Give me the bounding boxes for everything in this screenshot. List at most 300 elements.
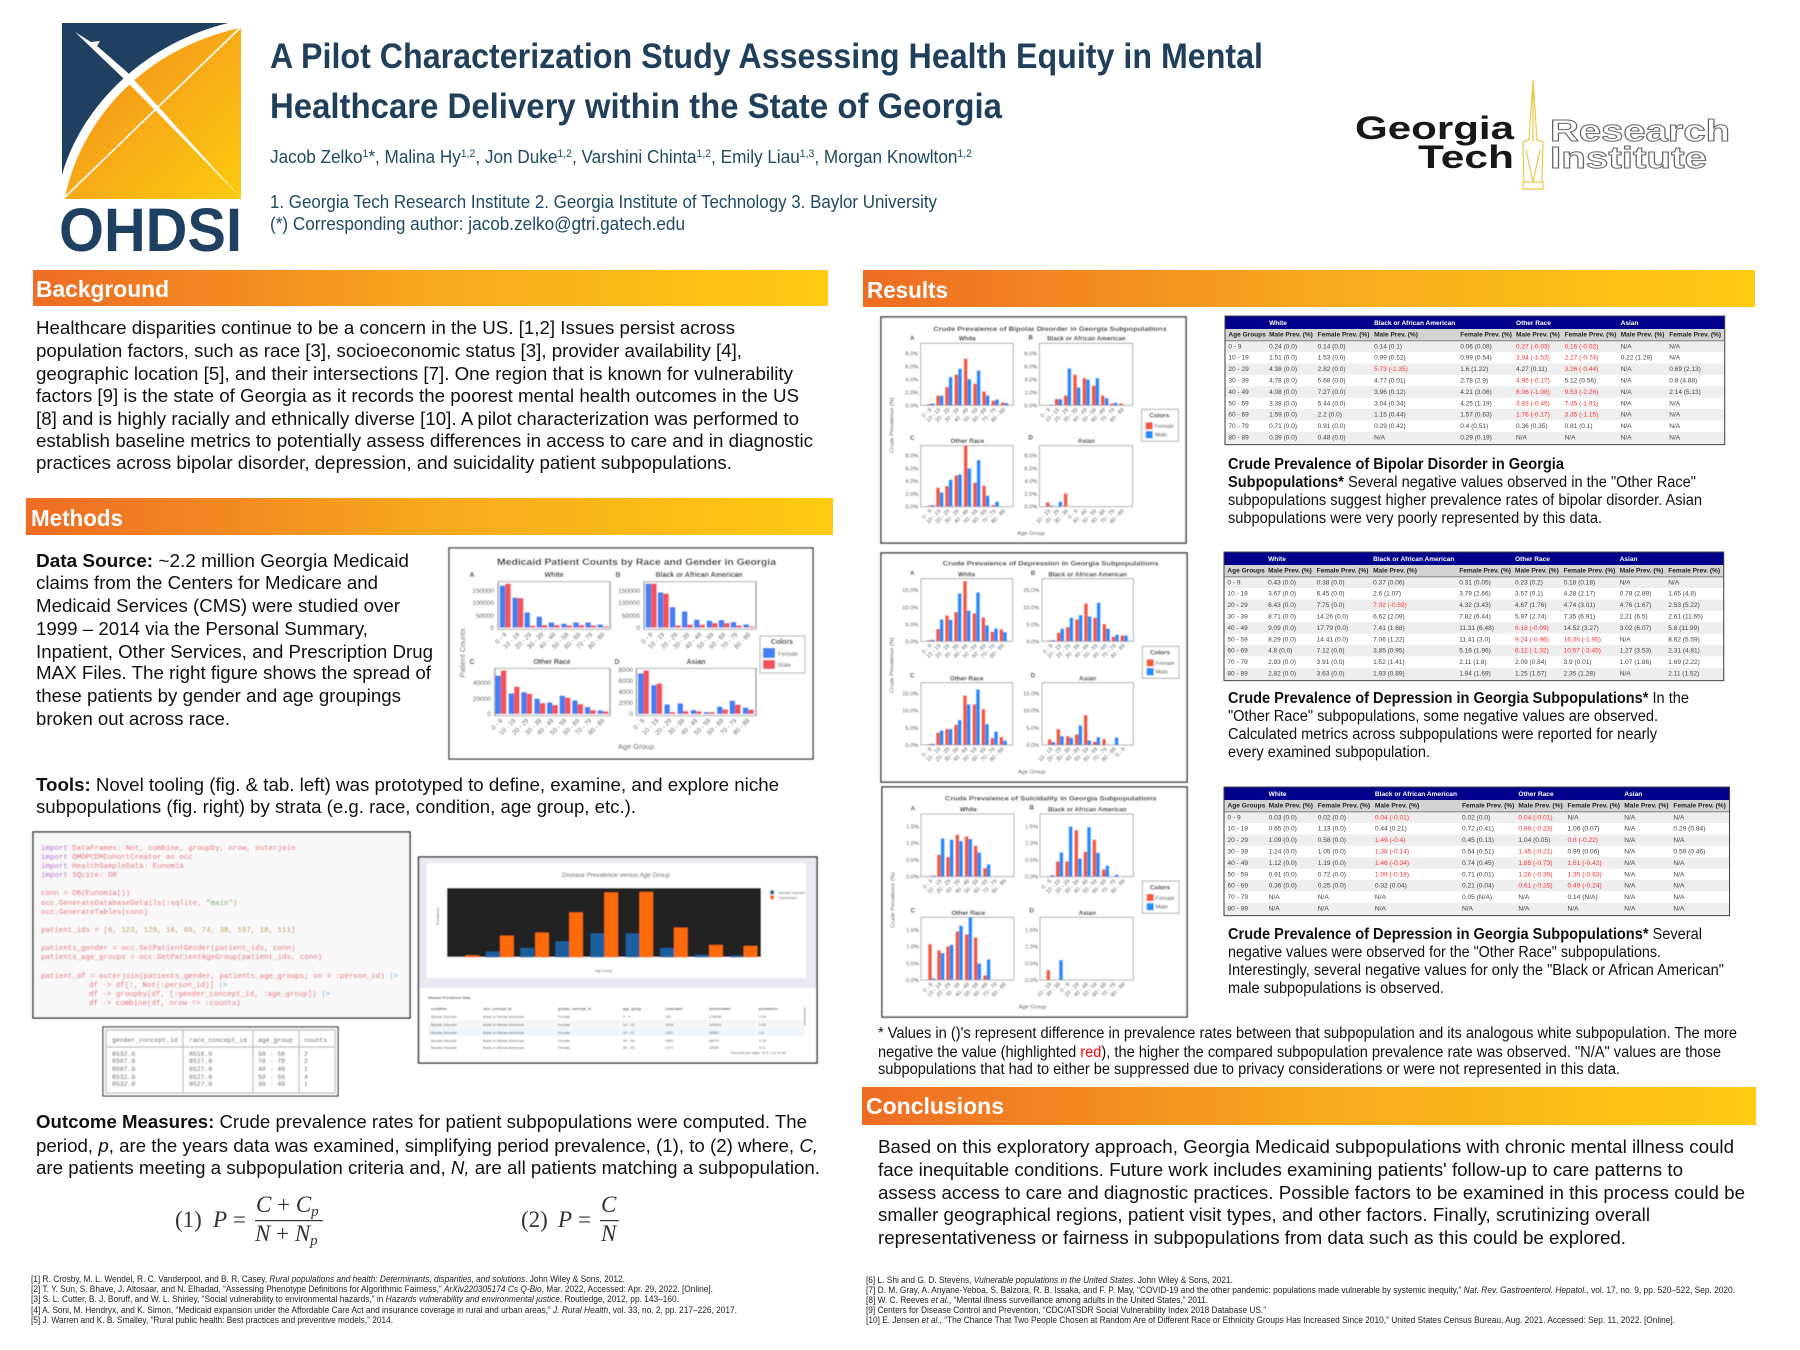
table: depression prevalence: Female Prev. (%) bbox=[1668, 568, 1720, 575]
authors: , Emily Liau bbox=[711, 147, 800, 167]
panel: code snippet: import HealthSampleData: Eunomia bbox=[41, 863, 184, 871]
chart: depression prevalence bbox=[881, 553, 1187, 782]
table: bipolar disorder prevalence: 1.6 (1.22) bbox=[1460, 366, 1488, 373]
references: left: [1] R. Crosby, M. L. Wendel, R. C. Vanderpool, and B. R. Casey, Rural populations and health: Determinants, disparities, and solutions. John Wiley & Sons, 2012. bbox=[31, 1274, 625, 1284]
chart: bipolar disorder prevalence: 60 - 69 bbox=[1090, 407, 1107, 424]
equation 1: C + C bbox=[256, 1192, 311, 1217]
chart: Medicaid patient counts: White bbox=[544, 572, 564, 579]
references: right: [9] Centers for Disease Control and Prevention, “CDC/ATSDR Social Vulnerability Index 2018 Database US.” bbox=[866, 1305, 1266, 1315]
chart: depression prevalence: 40 - 49 bbox=[953, 747, 969, 763]
affiliations: (*) Corresponding author: jacob.zelko@gtri.gatech.edu bbox=[270, 214, 685, 234]
table: bipolar disorder prevalence: Female Prev. (%) bbox=[1565, 332, 1616, 339]
table: depression prevalence: 9.09 (0.0) bbox=[1268, 625, 1296, 632]
chart: Medicaid patient counts: 8000 bbox=[619, 667, 633, 674]
chart: suicidality prevalence: 0.5% bbox=[1025, 961, 1038, 967]
table: cohort counts: 2 bbox=[304, 1051, 308, 1058]
chart: Medicaid patient counts: 50 - 59 bbox=[549, 717, 569, 737]
table: depression prevalence: 1.65 (4.8) bbox=[1668, 591, 1696, 598]
panel: code snippet: import DataFrames: Not, combine, groupby, nrow, outerjoin bbox=[41, 845, 295, 853]
table: bipolar disorder prevalence: 4.08 (0.0) bbox=[1269, 389, 1297, 396]
table: suicidality prevalence: Male Prev. (%) bbox=[1624, 803, 1669, 810]
chart: Medicaid patient counts: 60 - 69 bbox=[706, 717, 726, 737]
table: bipolar disorder prevalence: 2.82 (0.0) bbox=[1318, 366, 1346, 373]
table: depression prevalence: 11.41 (3.0) bbox=[1459, 636, 1490, 643]
table: suicidality prevalence: N/A bbox=[1624, 894, 1636, 901]
table: depression prevalence: 6.43 (0.0) bbox=[1268, 602, 1296, 609]
table: suicidality prevalence: 0.25 (0.0) bbox=[1318, 883, 1346, 890]
text block: outcome measures bbox=[36, 1111, 820, 1178]
panel: dashboard screenshot: 178598 bbox=[709, 1015, 721, 1019]
caption: bipolar disorder: Subpopulations* Several negative values observed in the "Other Race" bbox=[1228, 474, 1696, 491]
references: right: [10] E. Jensen et al., “The Chance That Two People Chosen at Random Are of Different Race or Ethnicity Groups Has Increased Since 2010,” United States Census Bureau, Aug. 2021. Accessed: Sep. 11, 2022. [Online]. bbox=[866, 1315, 1675, 1325]
table: depression prevalence: 7.06 (1.22) bbox=[1373, 636, 1405, 643]
table: suicidality prevalence: 1.46 (-0.34) bbox=[1375, 860, 1409, 867]
chart: depression prevalence: 80 - 89 bbox=[989, 747, 1006, 763]
table: suicidality prevalence: 1.85 (-0.73) bbox=[1518, 860, 1553, 867]
footnote: negative the value (highlighted red), the higher the compared subpopulation prevalence rate was observed. "N/A" values are those bbox=[878, 1044, 1721, 1061]
table: suicidality prevalence: 0.54 (0.51) bbox=[1462, 849, 1494, 856]
chart: depression prevalence: 30 - 39 bbox=[944, 643, 960, 660]
chart: suicidality prevalence: 50 - 59 bbox=[963, 879, 980, 895]
table: depression prevalence: 2.35 (1.28) bbox=[1564, 671, 1595, 678]
table: suicidality prevalence: N/A bbox=[1673, 860, 1685, 867]
panel: dashboard screenshot: Disease Prevalence Data bbox=[428, 996, 471, 1000]
chart: bipolar disorder prevalence: 80 - 89 bbox=[1109, 509, 1126, 525]
table: bipolar disorder prevalence: 9.53 (-2.26) bbox=[1565, 389, 1598, 396]
chart: Medicaid patient counts: 60 - 69 bbox=[562, 717, 582, 737]
table: depression prevalence: 17.79 (0.0) bbox=[1317, 625, 1348, 632]
table: cohort counts: 8527.0 bbox=[189, 1058, 212, 1065]
chart: depression prevalence: 30 - 39 bbox=[1065, 643, 1081, 660]
table: depression prevalence: N/A bbox=[1620, 579, 1631, 586]
chart: Medicaid patient counts: 0 bbox=[636, 625, 640, 632]
table: cohort counts: 40 - 49 bbox=[258, 1081, 285, 1088]
panel: dashboard screenshot: age_group bbox=[623, 1007, 642, 1011]
table: suicidality prevalence: 0 - 9 bbox=[1227, 814, 1241, 821]
table: suicidality prevalence: N/A bbox=[1462, 906, 1474, 913]
chart: bipolar disorder prevalence: 70 - 79 bbox=[1100, 509, 1116, 525]
chart: Medicaid patient counts: 0 - 9 bbox=[640, 631, 655, 646]
chart: bipolar disorder prevalence: 2.0% bbox=[1024, 390, 1037, 396]
chart: depression prevalence: 50 - 59 bbox=[962, 747, 979, 763]
caption: bipolar disorder bbox=[1228, 456, 1702, 527]
chart: bipolar disorder prevalence: 60 - 69 bbox=[972, 509, 988, 525]
table: bipolar disorder prevalence: N/A bbox=[1621, 423, 1632, 430]
chart: Medicaid patient counts: 2000 bbox=[619, 700, 633, 707]
table: bipolar disorder prevalence: 0.16 (-0.02) bbox=[1565, 343, 1598, 350]
text block: conclusions bbox=[878, 1136, 1745, 1248]
table: suicidality prevalence: Female Prev. (%) bbox=[1462, 803, 1514, 810]
chart: depression prevalence: D bbox=[1031, 673, 1036, 680]
table: depression prevalence: 7.12 (0.0) bbox=[1317, 648, 1345, 655]
table: depression prevalence: N/A bbox=[1620, 636, 1631, 643]
table: bipolar disorder prevalence: N/A bbox=[1621, 378, 1632, 385]
table: cohort counts: 8507.0 bbox=[112, 1066, 135, 1073]
table: bipolar disorder prevalence: 7.35 (-1.91) bbox=[1565, 400, 1598, 407]
table: bipolar disorder prevalence: N/A bbox=[1669, 412, 1681, 419]
chart: bipolar disorder prevalence: 30 - 39 bbox=[944, 509, 961, 525]
table: bipolar disorder prevalence: N/A bbox=[1516, 435, 1528, 442]
chart: bipolar disorder prevalence: 30 - 39 bbox=[944, 407, 961, 424]
table: cohort counts: 8516.0 bbox=[189, 1051, 212, 1058]
table: suicidality prevalence: 30 - 39 bbox=[1227, 849, 1248, 856]
text block: outcome measures: period, p, are the years data was examined, simplifying period prevalence, (1), to (2) where, C, bbox=[36, 1135, 818, 1156]
table: depression prevalence: 1.52 (1.41) bbox=[1373, 659, 1405, 666]
chart: suicidality prevalence: Colors bbox=[1150, 884, 1170, 891]
table: bipolar disorder prevalence: N/A bbox=[1621, 412, 1632, 419]
chart: suicidality prevalence: Crude Prevalence of Suicidality in Georgia Subpopulations bbox=[945, 796, 1157, 803]
panel: dashboard screenshot: 0.06 bbox=[759, 1015, 766, 1019]
chart: Medicaid patient counts: 40 - 49 bbox=[536, 717, 556, 737]
table: bipolar disorder prevalence: 0.69 (2.13) bbox=[1669, 366, 1701, 373]
table: cohort counts: gender_concept_id bbox=[112, 1037, 178, 1044]
text block: conclusions: representativeness or fairness in subpopulations from data such as this could be explored. bbox=[878, 1227, 1626, 1248]
chart: Medicaid patient counts: Other Race bbox=[533, 659, 571, 666]
panel: dashboard screenshot: 20 - 29 bbox=[623, 1031, 634, 1035]
equation 1: p bbox=[309, 1233, 318, 1249]
table: bipolar disorder prevalence: 10 - 19 bbox=[1228, 355, 1249, 362]
panel: dashboard screenshot: Bipolar Disorder bbox=[431, 1031, 457, 1035]
chart: bipolar disorder prevalence: 4.0% bbox=[1024, 378, 1037, 384]
chart: suicidality prevalence: 60 - 69 bbox=[973, 982, 989, 999]
panel: dashboard screenshot: race_concept_id bbox=[483, 1007, 511, 1011]
panel: dashboard screenshot: Bipolar Disorder bbox=[779, 891, 806, 895]
table: depression prevalence: Female Prev. (%) bbox=[1459, 568, 1511, 575]
chart: depression prevalence: Male bbox=[1156, 670, 1168, 676]
chart: Medicaid patient counts: 50 - 59 bbox=[693, 717, 713, 737]
panel: dashboard screenshot: Age Group bbox=[595, 969, 612, 973]
table: depression prevalence: 4.32 (3.43) bbox=[1459, 602, 1491, 609]
chart: bipolar disorder prevalence: 10 - 19 bbox=[926, 407, 942, 424]
table: depression prevalence: 2.09 (0.84) bbox=[1515, 659, 1547, 666]
chart: Medicaid patient counts: 80 - 89 bbox=[733, 631, 753, 651]
table: depression prevalence: 1.94 (1.69) bbox=[1459, 671, 1491, 678]
text block: data source: Data Source: ~2.2 million Georgia Medicaid bbox=[36, 550, 409, 571]
table: suicidality prevalence: N/A bbox=[1269, 906, 1280, 913]
table: suicidality prevalence: 1.26 (-0.35) bbox=[1518, 871, 1553, 878]
chart: suicidality prevalence: 70 - 79 bbox=[1101, 982, 1117, 999]
panel: code snippet: patients_age_groups = occ.GetPatientAgeGroup(patient_ids, conn) bbox=[41, 954, 322, 962]
table: depression prevalence: 7.02 (-0.59) bbox=[1373, 602, 1407, 609]
table: cohort counts: 4 bbox=[304, 1074, 308, 1081]
text block: tools: Tools: Novel tooling (fig. & tab. left) was prototyped to define, examine, and explore niche bbox=[36, 774, 779, 795]
chart: depression prevalence: 70 - 79 bbox=[980, 643, 997, 660]
text block: data source: claims from the Centers for Medicare and bbox=[36, 572, 378, 593]
footnote: subpopulations that had to either be suppressed due to privacy considerations or were not represented in this data. bbox=[878, 1061, 1620, 1078]
chart: suicidality prevalence: 10 - 19 bbox=[927, 879, 943, 895]
table: depression prevalence: 0.43 (0.0) bbox=[1268, 579, 1296, 586]
chart: depression prevalence: 15.0% bbox=[1023, 692, 1039, 698]
panel: code snippet: occ.GenerateDatabaseDetails(:sqlite, "main") bbox=[41, 900, 237, 908]
chart: depression prevalence: 10.0% bbox=[902, 605, 918, 611]
chart: depression prevalence: Asian bbox=[1079, 675, 1096, 682]
table: depression prevalence: 3.63 (0.0) bbox=[1317, 671, 1345, 678]
table: bipolar disorder prevalence: Asian bbox=[1621, 320, 1639, 327]
table: suicidality prevalence: 10 - 19 bbox=[1227, 826, 1248, 833]
icon: OHDSI logo: OHDSI bbox=[59, 196, 242, 264]
table: bipolar disorder prevalence: 1.76 (-0.17) bbox=[1516, 412, 1550, 419]
chart: bipolar disorder prevalence: 10 - 19 bbox=[1035, 509, 1052, 525]
caption: depression: "Other Race" subpopulations, some negative values are observed. bbox=[1228, 708, 1658, 725]
table: bipolar disorder prevalence: 0.99 (0.52) bbox=[1374, 355, 1406, 362]
table: bipolar disorder prevalence: 0.29 (0.42) bbox=[1374, 423, 1406, 430]
chart: Medicaid patient counts: 60 - 69 bbox=[563, 631, 583, 651]
table: bipolar disorder prevalence: 4.95 (-0.17) bbox=[1516, 378, 1550, 385]
chart: Medicaid patient counts: Male bbox=[778, 663, 792, 669]
table: suicidality prevalence: 0.05 (N/A) bbox=[1462, 894, 1492, 901]
table: depression prevalence: 0.37 (0.06) bbox=[1373, 579, 1405, 586]
chart: depression prevalence: 60 - 69 bbox=[971, 643, 988, 660]
table: suicidality prevalence: 0.29 (0.84) bbox=[1673, 826, 1705, 833]
chart: depression prevalence: 30 - 39 bbox=[1055, 747, 1072, 763]
chart: bipolar disorder prevalence: 0 - 9 bbox=[921, 407, 933, 419]
chart: Medicaid patient counts: 50 - 59 bbox=[551, 631, 571, 651]
table: suicidality prevalence: Male Prev. (%) bbox=[1269, 803, 1313, 810]
equation 1: = bbox=[233, 1207, 246, 1232]
chart: Medicaid patient counts: 60 - 69 bbox=[708, 631, 728, 651]
table: depression prevalence: 0.18 (0.18) bbox=[1564, 579, 1595, 586]
table: bipolar disorder prevalence: 0.99 (0.54) bbox=[1460, 355, 1492, 362]
panel: dashboard screenshot: Black or African American bbox=[483, 1023, 524, 1027]
panel: dashboard screenshot: Records per page: 10 ▾ 1-10 of 36 bbox=[731, 1051, 786, 1055]
table: bipolar disorder prevalence: 3.96 (0.12) bbox=[1374, 389, 1406, 396]
table: depression prevalence: 8.62 (5.59) bbox=[1668, 636, 1700, 643]
table: suicidality prevalence: N/A bbox=[1624, 906, 1636, 913]
chart: suicidality prevalence: 60 - 69 bbox=[973, 879, 989, 895]
chart: suicidality prevalence: Male bbox=[1156, 905, 1168, 911]
chart: Medicaid patient counts: Patient Counts bbox=[458, 628, 467, 678]
table: depression prevalence: 2.61 (11.65) bbox=[1668, 614, 1703, 621]
chart: suicidality prevalence: 10 - 19 bbox=[1036, 982, 1053, 999]
table: suicidality prevalence: Asian bbox=[1624, 791, 1642, 798]
equation 2: P bbox=[557, 1207, 572, 1232]
chart: suicidality prevalence: 0.0% bbox=[1025, 978, 1038, 984]
table: suicidality prevalence: 1.09 (0.0) bbox=[1269, 837, 1297, 844]
table: suicidality prevalence: Female Prev. (%) bbox=[1318, 803, 1370, 810]
chart: depression prevalence: Crude Prevalence of Depression in Georgia Subpopulations bbox=[943, 561, 1159, 568]
table: suicidality prevalence: 0.74 (0.45) bbox=[1462, 860, 1494, 867]
table: bipolar disorder prevalence: 0.48 (0.0) bbox=[1318, 435, 1346, 442]
table: bipolar disorder prevalence: 3.26 (-0.44) bbox=[1565, 366, 1598, 373]
table: bipolar disorder prevalence: 0.14 (0.1) bbox=[1374, 343, 1402, 350]
panel: dashboard screenshot: 66374 bbox=[709, 1039, 719, 1043]
table: suicidality prevalence: 0.65 (0.0) bbox=[1269, 826, 1297, 833]
heading: Conclusions bbox=[862, 1087, 1756, 1125]
table: depression prevalence: Black or African American bbox=[1373, 556, 1454, 563]
table: cohort counts: 50 - 59 bbox=[258, 1051, 285, 1058]
table: depression prevalence: 20 - 29 bbox=[1227, 602, 1248, 609]
text block: tools: subpopulations (fig. right) by strata (e.g. race, condition, age group, etc.). bbox=[36, 796, 636, 817]
table: bipolar disorder prevalence: 0.14 (0.0) bbox=[1318, 343, 1346, 350]
chart: bipolar disorder prevalence: Colors bbox=[1149, 413, 1170, 420]
table: depression prevalence: 9.18 (-0.09) bbox=[1515, 625, 1549, 632]
table: depression prevalence: 60 - 69 bbox=[1227, 648, 1248, 655]
chart: bipolar disorder prevalence: 6.0% bbox=[905, 466, 918, 472]
table: suicidality prevalence: Female Prev. (%) bbox=[1568, 803, 1620, 810]
table: bipolar disorder prevalence: 0.22 (1.29) bbox=[1621, 355, 1652, 362]
table: depression prevalence: 6.12 (-1.32) bbox=[1515, 648, 1549, 655]
table: bipolar disorder prevalence: N/A bbox=[1621, 435, 1632, 442]
authors: , Varshini Chinta bbox=[572, 147, 697, 167]
chart: suicidality prevalence: 0.0% bbox=[906, 978, 919, 984]
authors: 1,2 bbox=[697, 148, 711, 160]
table: depression prevalence: 1.27 (3.53) bbox=[1620, 648, 1651, 655]
table: bipolar disorder prevalence: 5.44 (0.0) bbox=[1318, 400, 1346, 407]
table: bipolar disorder prevalence: 2.27 (-0.74) bbox=[1565, 355, 1598, 362]
chart: suicidality prevalence: 0.5% bbox=[906, 961, 919, 967]
title: Healthcare Delivery within the State of Georgia bbox=[270, 87, 1003, 126]
table: bipolar disorder prevalence: 5.68 (0.0) bbox=[1318, 378, 1346, 385]
table: suicidality prevalence: 0.02 (0.0) bbox=[1318, 814, 1346, 821]
chart: bipolar disorder prevalence: Crude Prevalence of Bipolar Disorder in Georgia Subpopulations bbox=[933, 326, 1167, 333]
footnote bbox=[878, 1025, 1737, 1078]
chart: suicidality prevalence: Female bbox=[1156, 896, 1175, 902]
panel: dashboard screenshot: Female bbox=[558, 1015, 570, 1019]
chart: Medicaid patient counts: 20 - 29 bbox=[514, 631, 534, 651]
table: depression prevalence: N/A bbox=[1668, 579, 1680, 586]
table: suicidality prevalence: N/A bbox=[1673, 814, 1685, 821]
authors: 1,2 bbox=[557, 148, 572, 160]
table: depression prevalence: 4.67 (1.76) bbox=[1515, 602, 1547, 609]
table: depression prevalence: 14.41 (0.0) bbox=[1317, 636, 1348, 643]
table: bipolar disorder prevalence: 3.38 (0.0) bbox=[1269, 400, 1297, 407]
chart: bipolar disorder prevalence: Other Race bbox=[950, 438, 985, 445]
text block: data source: MAX Files. The right figure shows the spread of bbox=[36, 662, 432, 683]
chart: depression prevalence: 60 - 69 bbox=[971, 747, 988, 763]
chart: Medicaid patient counts: 70 - 79 bbox=[720, 631, 740, 651]
table: bipolar disorder prevalence: 0.29 (0.19) bbox=[1460, 435, 1492, 442]
heading: Results: Results bbox=[867, 277, 948, 303]
chart: depression prevalence: 0.0% bbox=[1026, 639, 1039, 645]
table: suicidality prevalence: 1.19 (0.0) bbox=[1318, 860, 1346, 867]
table: depression prevalence: 7.82 (6.44) bbox=[1459, 614, 1491, 621]
table: cohort counts: 8527.0 bbox=[189, 1074, 212, 1081]
table: bipolar disorder prevalence: 6.06 (-1.98) bbox=[1516, 389, 1550, 396]
chart: bipolar disorder prevalence: 0.0% bbox=[1024, 505, 1037, 511]
table: suicidality prevalence: 0.36 (0.0) bbox=[1269, 883, 1297, 890]
chart: depression prevalence: 0.0% bbox=[905, 639, 918, 645]
chart: Medicaid patient counts: 40000 bbox=[473, 680, 491, 687]
chart: suicidality prevalence: 40 - 49 bbox=[1073, 982, 1090, 999]
table: suicidality prevalence: Age Groups bbox=[1227, 803, 1266, 810]
chart: suicidality prevalence: 0 - 9 bbox=[922, 982, 934, 994]
text block: conclusions: assess access to care and diagnostic practices. Possible factors to be examined in this process could be bbox=[878, 1182, 1745, 1203]
chart: bipolar disorder prevalence: Female bbox=[1155, 424, 1174, 430]
chart: Medicaid patient counts: 0 bbox=[487, 711, 491, 718]
references: left: [4] A. Soni, M. Hendryx, and K. Simon, “Medicaid expansion under the Affordable Care Act and insurance coverage in rural and urban areas,” J. Rural Health, vol. 33, no. 2, pp. 217–226, 2017. bbox=[31, 1305, 737, 1315]
chart: bipolar disorder prevalence: 60 - 69 bbox=[1090, 509, 1107, 525]
authors: 1,2 bbox=[957, 148, 972, 160]
table: bipolar disorder prevalence: N/A bbox=[1669, 400, 1681, 407]
chart: bipolar disorder prevalence: Crude Prevalence (%) bbox=[890, 397, 896, 453]
chart: bipolar disorder prevalence: Black or African American bbox=[1047, 336, 1126, 343]
panel: dashboard screenshot: 0.99 bbox=[759, 1023, 766, 1027]
chart: Medicaid patient counts: 20 - 29 bbox=[654, 717, 674, 737]
chart: bipolar disorder prevalence: 8.0% bbox=[1024, 454, 1037, 460]
chart: suicidality prevalence: 1.0% bbox=[1025, 944, 1038, 950]
panel: code snippet: import OMOPCDMCohortCreator as occ bbox=[41, 854, 193, 862]
table: bipolar disorder prevalence: N/A bbox=[1374, 435, 1386, 442]
panel: dashboard screenshot: Female bbox=[558, 1031, 570, 1035]
table: suicidality prevalence: 0.21 (0.04) bbox=[1462, 883, 1494, 890]
chart: suicidality prevalence: 30 - 39 bbox=[1045, 982, 1062, 999]
chart: suicidality prevalence: 40 - 49 bbox=[954, 879, 971, 895]
chart: Medicaid patient counts: 20000 bbox=[473, 696, 491, 703]
chart: bipolar disorder prevalence: 50 - 59 bbox=[963, 509, 979, 525]
panel: code snippet: patient_df = outerjoin(patients_gender, patients_age_groups; on = :person_id) |> bbox=[41, 973, 399, 981]
table: bipolar disorder prevalence: 1.57 (0.63) bbox=[1460, 412, 1492, 419]
chart: Medicaid patient counts: 70 - 79 bbox=[719, 717, 739, 737]
table: depression prevalence: 7.75 (0.0) bbox=[1317, 602, 1345, 609]
chart: Medicaid patient counts: 70 - 79 bbox=[575, 631, 595, 651]
chart: Medicaid patient counts: 40 - 49 bbox=[538, 631, 558, 651]
footnote: * Values in ()'s represent difference in prevalence rates between that subpopulation and its analogous white subpopulation. The more bbox=[878, 1025, 1737, 1042]
table: depression prevalence: 40 - 49 bbox=[1227, 625, 1248, 632]
table: depression prevalence: 2.93 (0.0) bbox=[1268, 659, 1296, 666]
chart: suicidality prevalence: 80 - 89 bbox=[991, 879, 1008, 895]
panel: dashboard screenshot: Depression bbox=[779, 896, 797, 900]
table: suicidality prevalence: Male Prev. (%) bbox=[1375, 803, 1419, 810]
table: depression prevalence: 2.53 (5.22) bbox=[1668, 602, 1700, 609]
chart: Medicaid patient counts: 20 - 29 bbox=[511, 717, 531, 737]
panel: code snippet: df -> groupby(df, [:gender_concept_id, :age_group]) |> bbox=[89, 991, 331, 999]
table: bipolar disorder prevalence: 0.91 (0.0) bbox=[1318, 423, 1346, 430]
table: suicidality prevalence: 0.44 (0.21) bbox=[1375, 826, 1407, 833]
chart: bipolar disorder prevalence: 0 - 9 bbox=[1040, 407, 1052, 419]
table: depression prevalence: Male Prev. (%) bbox=[1268, 568, 1312, 575]
table: suicidality prevalence: 0.88 (-0.23) bbox=[1518, 826, 1553, 833]
chart: suicidality prevalence: Age Group bbox=[1019, 1005, 1046, 1011]
chart: depression prevalence: Age Group bbox=[1018, 769, 1045, 775]
chart: bipolar disorder prevalence: 2.0% bbox=[1024, 492, 1037, 498]
table: cohort counts: 8532.0 bbox=[112, 1051, 135, 1058]
table: depression prevalence: 5.97 (2.74) bbox=[1515, 614, 1547, 621]
icon: OHDSI logo bbox=[59, 23, 242, 264]
references: right: [6] L. Shi and G. D. Stevens, Vulnerable populations in the United States. John Wiley & Sons, 2021. bbox=[866, 1275, 1233, 1285]
table: suicidality prevalence: 0.71 (0.01) bbox=[1462, 871, 1494, 878]
chart: bipolar disorder prevalence: 70 - 79 bbox=[981, 509, 998, 525]
chart: Medicaid patient counts: Medicaid Patient Counts by Race and Gender in Georgia bbox=[497, 557, 777, 568]
affiliations bbox=[270, 192, 937, 234]
chart: depression prevalence: 80 - 89 bbox=[1110, 643, 1127, 660]
table: suicidality prevalence: N/A bbox=[1673, 906, 1685, 913]
table: suicidality prevalence: 1.38 (-0.14) bbox=[1375, 849, 1409, 856]
table: bipolar disorder prevalence: N/A bbox=[1565, 435, 1576, 442]
authors: 1,3 bbox=[800, 148, 814, 160]
table: suicidality prevalence: 0.45 (0.13) bbox=[1462, 837, 1494, 844]
table: suicidality prevalence: N/A bbox=[1673, 871, 1685, 878]
table: suicidality prevalence: 0.61 (-0.25) bbox=[1518, 883, 1553, 890]
chart: depression prevalence: Black or African American bbox=[1048, 572, 1127, 579]
table: bipolar disorder prevalence: 0.06 (0.08) bbox=[1460, 343, 1492, 350]
table: suicidality prevalence: 0.14 (N/A) bbox=[1568, 894, 1598, 901]
table: depression prevalence: Male Prev. (%) bbox=[1620, 568, 1663, 575]
table: bipolar disorder prevalence: Male Prev. (%) bbox=[1269, 332, 1313, 339]
chart: Medicaid patient counts: A bbox=[469, 572, 475, 579]
affiliations: 1. Georgia Tech Research Institute 2. Georgia Institute of Technology 3. Baylor University bbox=[270, 192, 937, 212]
chart: bipolar disorder prevalence: 2.0% bbox=[905, 390, 918, 396]
panel: dashboard screenshot: Black or African American bbox=[483, 1031, 524, 1035]
text block: background: geographic location [5], and their intersections [7]. One region that is known for vulnerability bbox=[36, 363, 794, 384]
chart: Medicaid patient counts: 20 - 29 bbox=[660, 631, 680, 651]
table: depression prevalence: 0.23 (0.2) bbox=[1515, 579, 1543, 586]
table: bipolar disorder prevalence: 40 - 49 bbox=[1228, 389, 1249, 396]
table: bipolar disorder prevalence: 50 - 59 bbox=[1228, 400, 1249, 407]
chart: bipolar disorder prevalence bbox=[881, 317, 1186, 543]
panel: dashboard screenshot: 0 - 9 bbox=[623, 1015, 630, 1019]
chart: bipolar disorder prevalence: 30 - 39 bbox=[1063, 407, 1079, 424]
chart: bipolar disorder prevalence: 8.0% bbox=[905, 352, 918, 358]
